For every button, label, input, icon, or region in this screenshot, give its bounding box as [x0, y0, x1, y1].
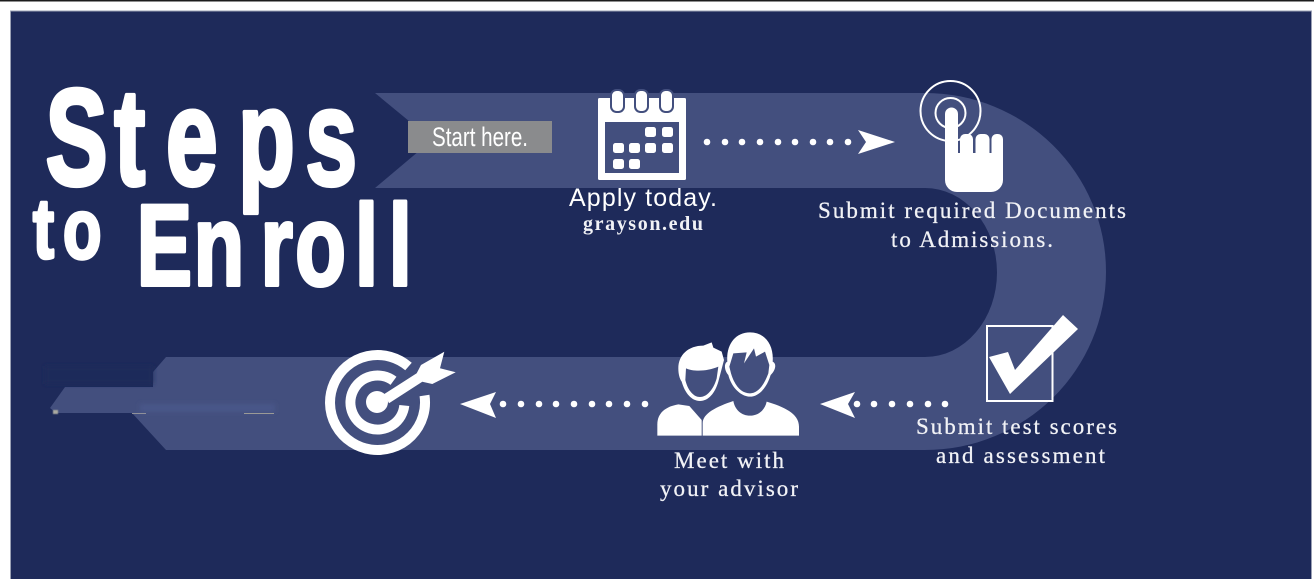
title: Steps [46, 61, 357, 214]
step 4 text [660, 448, 798, 501]
start here label: Start here. [432, 122, 528, 152]
step 1 text [569, 184, 717, 235]
step 4 text: your advisor [660, 476, 798, 501]
icon: target with arrow [330, 352, 456, 450]
title [33, 61, 412, 310]
step 3 text: and assessment [936, 443, 1106, 468]
arrow: checkbox to advisor [820, 392, 948, 418]
smudged ribbon end [45, 366, 275, 414]
title: to [33, 182, 101, 276]
icon: touch hand [920, 81, 1003, 192]
step 1 text: grayson.edu [583, 213, 703, 235]
step 3 text: Submit test scores [916, 414, 1117, 439]
step 2 text [818, 198, 1126, 252]
arrow: calendar to hand [704, 130, 895, 154]
icon: two people [657, 332, 799, 436]
arrow: advisor to target [460, 392, 648, 418]
title: Enroll [137, 182, 412, 310]
icon: calendar [598, 90, 686, 180]
step 2 text: to Admissions. [891, 227, 1053, 252]
icon: checkbox [987, 315, 1078, 401]
step 2 text: Submit required Documents [818, 198, 1126, 223]
step 4 text: Meet with [674, 448, 784, 473]
page top rule [0, 0, 1314, 2]
winding ribbon path [50, 93, 1106, 450]
step 1 text: Apply today. [569, 184, 717, 212]
step 3 text [916, 414, 1117, 468]
